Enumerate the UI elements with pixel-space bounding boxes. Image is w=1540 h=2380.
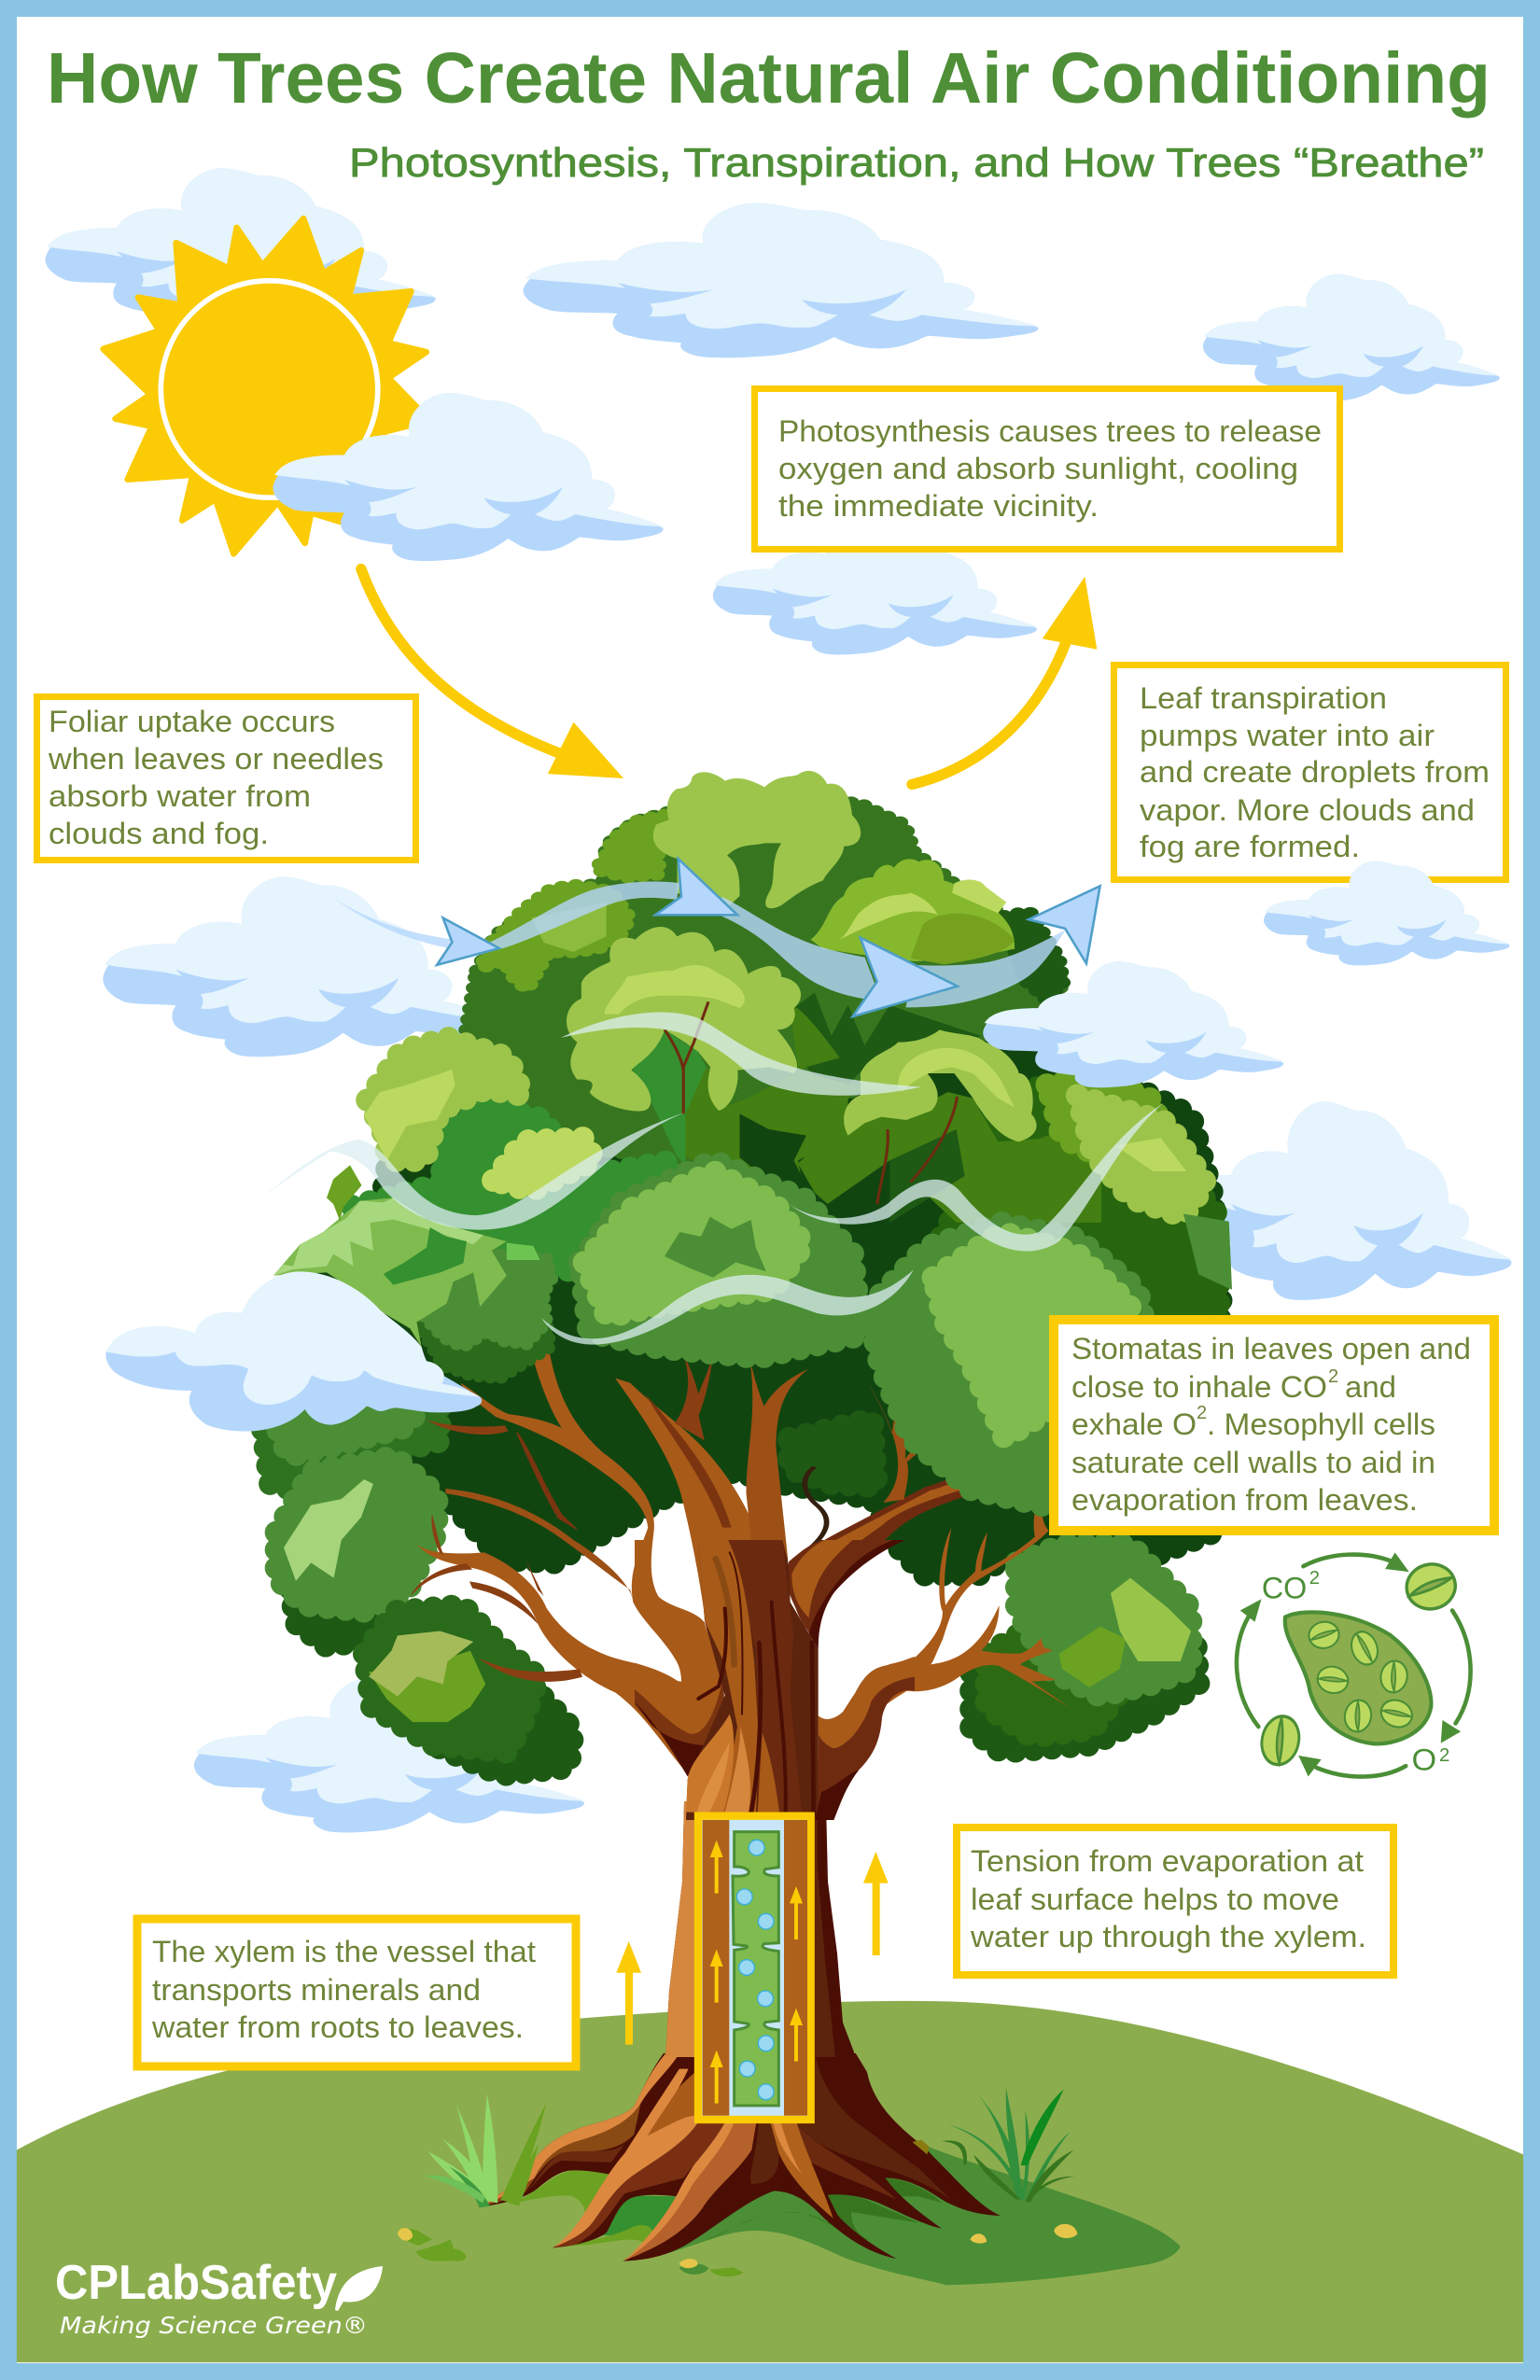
box: xylem: The xylem is the vessel that (152, 1935, 536, 1968)
central highlight (604, 965, 745, 1015)
title: How Trees Create Natural Air Conditioning (47, 38, 1491, 119)
box: stomatas: Stomatas in leaves open and (1071, 1332, 1471, 1365)
trunk lower brown (758, 1733, 779, 1813)
box: leaf transpiration: Leaf transpiration (1140, 681, 1387, 715)
upward arrow right of trunk (863, 1852, 889, 1955)
upward flow arrows inside xylem (710, 1841, 803, 2104)
diagram: stomata gas exchange cycle (1237, 1552, 1471, 1777)
trunk core (686, 1540, 833, 1820)
xylem walls (703, 1820, 729, 2116)
box: stomatas: evaporation from leaves. (1071, 1483, 1418, 1517)
main ground shadow (648, 2147, 1181, 2285)
thin inner limb (517, 1433, 577, 1529)
trunk streaks (698, 1552, 814, 1813)
cloud in front of tree, right (983, 961, 1283, 1087)
lower side limb (445, 1489, 633, 1599)
trunk side strips (665, 1801, 856, 2057)
box: foliar uptake: Foliar uptake occurs (49, 705, 335, 738)
dark spiky patch (740, 1113, 832, 1207)
right limb base highlight (791, 1540, 852, 1617)
cluster pale fringe (273, 1197, 483, 1276)
right olive cluster (1047, 1074, 1169, 1169)
trunk core mid (728, 1540, 803, 1820)
arrow: sunlight to tree (361, 569, 623, 778)
fallen leaves (679, 2224, 1077, 2276)
lower middle cluster (364, 1605, 573, 1775)
cloud in front of sun (273, 393, 664, 561)
right highlight (1115, 1138, 1186, 1171)
logo: CPLabSafety (55, 2256, 337, 2310)
box: foliar uptake: absorb water from (49, 779, 311, 813)
center vertical limb (746, 1353, 808, 1603)
cluster olive tip (327, 1165, 361, 1221)
lower left cluster (276, 1457, 437, 1646)
right root mid (783, 2125, 896, 2200)
thin red branches (877, 1097, 958, 1204)
right front cluster (868, 1223, 1165, 1509)
side canopy clusters (276, 1038, 1232, 1775)
right lower limb base (819, 1657, 915, 1820)
xylem frame (698, 1816, 811, 2120)
cluster dark patch (384, 1227, 467, 1285)
box: stomatas: saturate cell walls to aid in (1071, 1446, 1435, 1479)
grass tuft right (942, 2086, 1075, 2203)
wind ribbon: upper stream (490, 882, 1065, 1007)
box: foliar uptake: when leaves or needles (48, 742, 384, 776)
cloud in front of tree, left (105, 1271, 482, 1432)
left mid green band (352, 1161, 672, 1271)
front foliage clusters (580, 1161, 1165, 1509)
stoma open (1403, 1560, 1460, 1614)
right limb base dark (809, 1540, 905, 1649)
crown dark right edge (1004, 912, 1062, 999)
canopy dark mass (270, 987, 1222, 1575)
right arch cluster (844, 1029, 1037, 1141)
trunk right brown strip (803, 1801, 835, 2057)
CO2 label: 2 (1309, 1568, 1320, 1589)
cloud right behind tree (1169, 1101, 1511, 1300)
big left limb to trunk (416, 1544, 722, 1776)
central light cluster (567, 927, 801, 1112)
arrow: tree to air (912, 577, 1097, 784)
olive upper-left tuft (595, 815, 665, 877)
left limb junction shade (635, 1677, 725, 1748)
first root highlight (478, 2053, 679, 2207)
upper right highlight (840, 893, 938, 940)
right arch highlight (898, 1048, 1015, 1108)
upper right small tuft (952, 880, 1006, 913)
cluster dark underside (416, 1323, 550, 1379)
center front cluster (580, 1161, 861, 1358)
lower left front cluster (273, 1165, 552, 1379)
root silhouette (478, 2053, 1001, 2261)
crown dark spikes (794, 992, 981, 1099)
cluster mid green (424, 1253, 552, 1347)
right lower limb (842, 1489, 1071, 1727)
green patch under left root (602, 2196, 679, 2237)
left limb junction (635, 1540, 723, 1780)
box: leaf transpiration (1114, 665, 1506, 879)
box: tension: leaf surface helps to move (971, 1883, 1339, 1916)
small forks on left (410, 1514, 582, 1682)
right canopy mass (895, 1080, 1220, 1518)
darker shadow under roots (707, 2177, 942, 2240)
center left limb streak (645, 1393, 732, 1528)
trunk upper body (635, 1540, 915, 1820)
trunk lower silhouette (665, 1801, 856, 2057)
xylem right wall (784, 1820, 807, 2116)
logo (55, 2256, 383, 2339)
box: stomatas: and (1345, 1370, 1396, 1404)
left twig (427, 1421, 508, 1435)
olive patches under left roots (511, 2170, 653, 2247)
center-left root (623, 2123, 756, 2261)
cloud top center (524, 203, 1038, 357)
trunk lower left highlight (697, 1743, 730, 1813)
cloud overlapping transpiration box (1264, 861, 1509, 965)
upper crown foliage (467, 771, 1101, 1223)
right upper fork (868, 1383, 958, 1503)
wind ribbons and blue arrows (240, 859, 1283, 2207)
cycle arrowheads (1240, 1552, 1461, 1776)
left long limb (460, 1353, 717, 1696)
O2 label: 2 (1439, 1745, 1449, 1766)
cloud left of tree (103, 877, 501, 1057)
wind arrow 2 (655, 859, 737, 915)
lower right cluster (971, 1545, 1198, 1753)
right lower limb highlight (819, 1657, 915, 1748)
roots (478, 2053, 1001, 2261)
cluster bright leaf (507, 1243, 540, 1260)
right outer patch (1183, 1213, 1232, 1290)
box: leaf transpiration: vapor. More clouds and (1140, 793, 1475, 827)
wind arrow 4 (1029, 886, 1100, 963)
trunk lower streak (725, 1727, 750, 1813)
wind arrow 3 (853, 938, 958, 1016)
second root base (553, 2123, 724, 2247)
crown mid green mass (467, 803, 1062, 1160)
trunk left lit strip (665, 1801, 709, 2057)
olive left cluster light (531, 903, 607, 952)
right light cluster (1077, 1096, 1206, 1217)
leaf with stomata (1285, 1612, 1431, 1743)
water droplets (736, 1840, 774, 2100)
box: leaf transpiration: fog are formed. (1140, 830, 1360, 863)
cloud top right (1203, 274, 1500, 402)
right root brown (783, 2053, 951, 2200)
right limb base (789, 1540, 896, 1649)
tree canopy base (261, 987, 1222, 1575)
center fork (675, 1353, 713, 1440)
center-left root highlight (625, 2123, 734, 2261)
box: stomatas: 2 (1328, 1366, 1338, 1387)
second root upper dark (625, 2072, 695, 2153)
stoma closed (1257, 1713, 1303, 1768)
wind arrow 1 (437, 918, 499, 965)
breeze ribbons (240, 1013, 1164, 1345)
crown olive green right (798, 1092, 1101, 1223)
box: xylem: transports minerals and (152, 1973, 481, 2007)
box: stomatas (1054, 1320, 1494, 1531)
right center root highlight (774, 2123, 804, 2177)
box: leaf transpiration: pumps water into air (1140, 719, 1435, 752)
green hill (17, 2001, 1523, 2362)
ground leaves left (398, 2227, 466, 2261)
cloud lower left behind tree (194, 1678, 584, 1832)
box: xylem: water from roots to leaves. (151, 2010, 524, 2044)
wind ribbon: thin tail (334, 898, 451, 948)
right lower limb dark edge (815, 1771, 859, 1820)
CO2 label: CO (1262, 1572, 1307, 1605)
box: tension (957, 1827, 1393, 1975)
box: photosynthesis: the immediate vicinity. (778, 489, 1099, 523)
subtitle: Photosynthesis, Transpiration, and How Trees “Breathe” (349, 140, 1484, 186)
olive spot (912, 2140, 929, 2154)
cycle arrows (1237, 1555, 1471, 1777)
cloud top left (46, 168, 436, 329)
logo leaf (335, 2266, 383, 2311)
box: xylem (137, 1919, 576, 2066)
box: photosynthesis (754, 388, 1340, 549)
twigs in central hollow (665, 1001, 708, 1113)
left light cluster (364, 1038, 524, 1161)
box: stomatas: exhale O (1071, 1407, 1197, 1441)
cloud below photosynthesis box (713, 519, 1037, 654)
second root highlight (555, 2069, 698, 2247)
box: foliar uptake: clouds and fog. (49, 817, 269, 850)
box: tension: Tension from evaporation at (971, 1844, 1364, 1878)
dark twig (805, 1467, 827, 1549)
central green hollow (631, 1029, 707, 1164)
center left limb (615, 1379, 782, 1664)
left limb junction dark (635, 1701, 707, 1776)
trunk core left (698, 1540, 759, 1813)
box: foliar uptake (37, 696, 416, 861)
box: photosynthesis: Photosynthesis causes trees to release (778, 414, 1322, 448)
sun (104, 218, 429, 553)
O2 label (1412, 1743, 1449, 1776)
branches (410, 1353, 1071, 1776)
trunk lower left light (686, 1715, 734, 1813)
right limb highlight (794, 1472, 970, 1596)
inner dark branch area (889, 1129, 965, 1223)
left green mass (440, 1104, 565, 1206)
upper right cluster shade (911, 914, 1015, 964)
right limb (787, 1458, 1005, 1627)
upward arrow left of trunk (616, 1941, 641, 2045)
box: stomatas: 2 (1197, 1403, 1207, 1423)
crown olive green lower (681, 1005, 864, 1207)
pale yellow cluster (493, 1138, 595, 1191)
box: stomatas: . Mesophyll cells (1207, 1407, 1435, 1441)
olive left cluster (482, 885, 629, 989)
center root brown (750, 2123, 783, 2184)
right center root (771, 2123, 833, 2219)
left lower canopy fringe (261, 1388, 877, 1494)
upper right cluster (810, 859, 1015, 961)
box: leaf transpiration: and create droplets from (1140, 755, 1490, 789)
first root lower (525, 2144, 625, 2193)
cluster light green (273, 1197, 507, 1347)
O2 label: O (1412, 1743, 1436, 1776)
xylem vessel (733, 1832, 778, 2106)
box: tension: water up through the xylem. (970, 1920, 1366, 1953)
grass tuft left (425, 2093, 546, 2207)
ground shadow, patches and right grass (511, 2086, 1181, 2285)
first root mid (478, 2103, 641, 2207)
logo: Making Science Green® (60, 2312, 368, 2339)
top crown light (653, 771, 861, 912)
diagram: xylem cross section (616, 1816, 889, 2120)
box: stomatas: close to inhale CO (1071, 1370, 1327, 1404)
box: photosynthesis: oxygen and absorb sunlight, cooling (778, 452, 1298, 485)
